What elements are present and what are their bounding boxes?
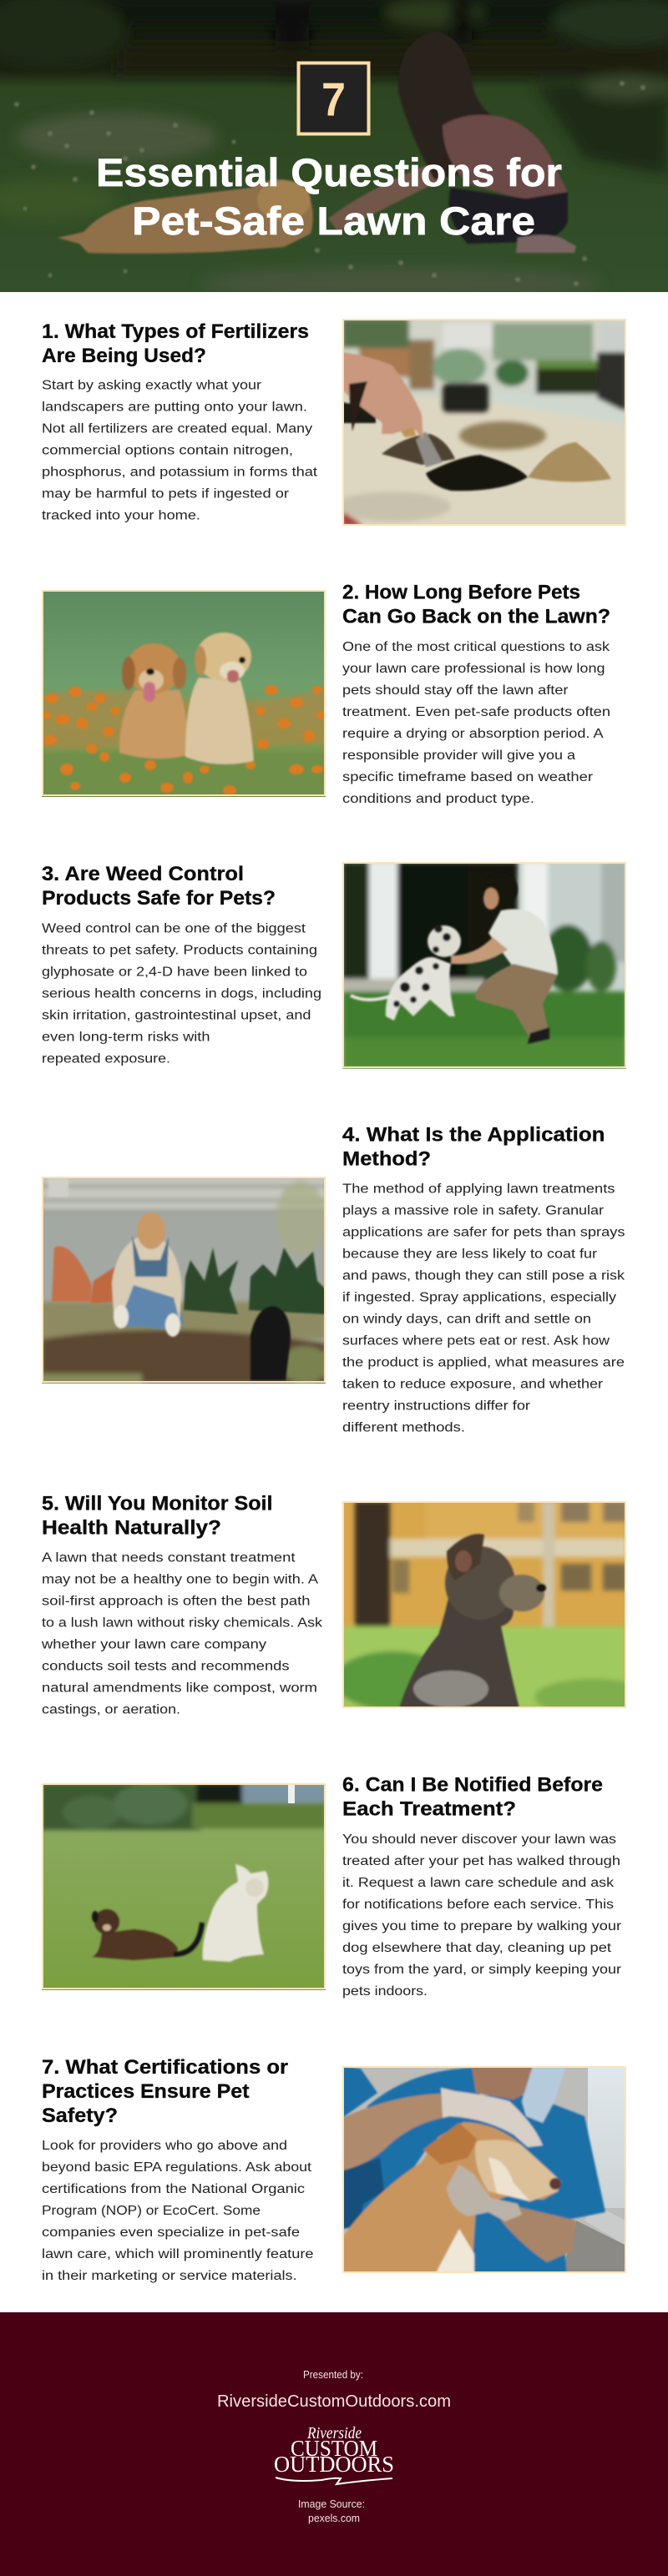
body text 3: serious health concerns in dogs, including [42, 986, 321, 1001]
heading 6: Each Treatment? [342, 1797, 516, 1821]
heading 6: 6. Can I Be Notified Before [342, 1774, 603, 1796]
body text 5: whether your lawn care company [41, 1637, 266, 1652]
body text 1: Not all fertilizers are created equal. Many [42, 422, 312, 436]
body text 1: landscapers are putting onto your lawn. [42, 401, 307, 414]
body text 2: One of the most critical questions to ask [342, 640, 610, 654]
body text 4: applications are safer for pets than sprays [342, 1225, 625, 1240]
heading 7 [42, 2056, 288, 2127]
body text 2: conditions and product type. [342, 792, 534, 806]
body text 3: glyphosate or 2,4-D have been linked to [42, 965, 307, 980]
body text 5: soil-first approach is often the best path [42, 1594, 311, 1609]
body text 2: specific timeframe based on weather [342, 770, 593, 784]
heading 7: 7. What Certifications or [42, 2056, 288, 2079]
heading 4 [342, 1123, 605, 1170]
body text 7: lawn care, which will prominently feature [42, 2247, 314, 2261]
heading 1: Are Being Used? [42, 345, 206, 367]
body text 6: for notifications before each service. This [342, 1898, 614, 1912]
body text 4: if ingested. Spray applications, especially [342, 1290, 616, 1305]
body text 5 [41, 1550, 322, 1717]
panel: question 7 [42, 2056, 626, 2283]
body text 1: commercial options contain nitrogen, [42, 444, 293, 457]
body text 3 [42, 921, 321, 1066]
logo: Riverside [306, 2424, 362, 2442]
title: Pet-Safe Lawn Care [132, 199, 535, 243]
heading 4: Method? [342, 1148, 431, 1170]
body text 1: Start by asking exactly what your [42, 379, 261, 392]
panel: question 1 [42, 319, 626, 526]
heading 1: 1. What Types of Fertilizers [42, 320, 309, 343]
logo [274, 2424, 394, 2484]
body text 6: gives you time to prepare by walking your [342, 1919, 621, 1933]
body text 7: beyond basic EPA regulations. Ask about [42, 2160, 312, 2175]
body text 3: repeated exposure. [42, 1051, 170, 1066]
body text 3: threats to pet safety. Products containing [42, 943, 317, 958]
heading 7: Safety? [42, 2105, 118, 2127]
image source: pexels.com [308, 2512, 360, 2524]
number badge [299, 63, 369, 134]
body text 1: tracked into your home. [42, 509, 200, 522]
body text 4: because they are less likely to coat fur [342, 1247, 597, 1262]
body text 2 [342, 640, 610, 806]
website url: RiversideCustomOutdoors.com [217, 2392, 451, 2411]
panel: question 6 [42, 1774, 621, 1999]
body text 7: Program (NOP) or EcoCert. Some [42, 2204, 261, 2218]
heading 3: 3. Are Weed Control [42, 863, 244, 885]
body text 4 [342, 1182, 625, 1435]
body text 7 [42, 2139, 314, 2283]
heading 7: Practices Ensure Pet [42, 2080, 250, 2103]
heading 6 [342, 1774, 603, 1821]
photo: vet holding a golden dog [342, 2066, 626, 2273]
panel: question 4 [42, 1123, 625, 1435]
image source [298, 2498, 365, 2524]
photo: scruffy dog in grass [342, 1501, 626, 1708]
body text 6 [342, 1832, 621, 1999]
heading 1 [42, 320, 309, 367]
number badge: 7 [321, 73, 346, 127]
body text 3: even long-term risks with [42, 1030, 210, 1045]
logo: CUSTOM [291, 2436, 377, 2461]
heading 3 [42, 863, 276, 910]
heading 2 [342, 581, 610, 628]
body text 3: skin irritation, gastrointestinal upset, and [42, 1008, 311, 1023]
body text 6: You should never discover your lawn was [342, 1832, 616, 1847]
heading 5: Health Naturally? [42, 1517, 221, 1539]
body text 7: companies even specialize in pet-safe [42, 2226, 300, 2240]
body text 6: it. Request a lawn care schedule and ask [342, 1876, 614, 1890]
photo: two dogs sitting on a lawn [42, 1783, 326, 1990]
body text 2: your lawn care professional is how long [342, 662, 605, 676]
panel: question 3 [42, 862, 626, 1069]
heading 3: Products Safe for Pets? [42, 887, 276, 910]
presented by: Presented by: [303, 2368, 363, 2381]
photo: gardener digging soil with black dog [42, 1177, 330, 1384]
body text 2: require a drying or absorption period. A [342, 727, 604, 741]
body text 4: and paws, though they can still pose a risk [342, 1268, 625, 1283]
body text 6: pets indoors. [342, 1984, 428, 1999]
body text 3: Weed control can be one of the biggest [42, 921, 306, 936]
body text 6: toys from the yard, or simply keeping your [342, 1963, 621, 1977]
body text 4: the product is applied, what measures are [342, 1355, 625, 1370]
footer [0, 2312, 668, 2576]
body text 1: phosphorus, and potassium in forms that [42, 466, 318, 479]
title [96, 150, 562, 243]
body text 5: to a lush lawn without risky chemicals. Ask [42, 1616, 322, 1631]
body text 6: treated after your pet has walked through [342, 1854, 620, 1868]
body text 4: on windy days, can drift and settle on [342, 1312, 591, 1327]
body text 4: The method of applying lawn treatments [342, 1182, 615, 1197]
body text 5: castings, or aeration. [42, 1702, 180, 1717]
hero photo: girl and dog on lawn [0, 0, 668, 300]
body text 5: may not be a healthy one to begin with. A [42, 1572, 319, 1587]
photo: man with dalmatian on lawn [342, 862, 626, 1069]
heading 2: Can Go Back on the Lawn? [342, 606, 610, 628]
body text 5: conducts soil tests and recommends [42, 1659, 290, 1674]
logo: OUTDOORS [274, 2452, 394, 2477]
hero banner [0, 0, 668, 300]
heading 4: 4. What Is the Application [342, 1123, 605, 1147]
photo: two golden retriever puppies [41, 590, 326, 797]
photo: hand scooping soil [334, 319, 626, 526]
body text 6: dog elsewhere that day, cleaning up pet [342, 1941, 612, 1955]
body text 4: taken to reduce exposure, and whether [342, 1377, 603, 1392]
title: Essential Questions for [96, 150, 562, 194]
body text 1: may be harmful to pets if ingested or [42, 487, 289, 501]
heading 2: 2. How Long Before Pets [342, 581, 580, 604]
body text 1 [42, 379, 318, 522]
body text 4: surfaces where pets eat or rest. Ask how [342, 1333, 610, 1348]
heading 5 [42, 1492, 272, 1539]
panel: question 5 [41, 1492, 651, 1717]
body text 5: natural amendments like compost, worm [42, 1681, 317, 1696]
body text 4: reentry instructions differ for [342, 1399, 530, 1414]
body text 5: A lawn that needs constant treatment [42, 1550, 296, 1565]
body text 7: certifications from the National Organic [42, 2182, 305, 2196]
image source: Image Source: [298, 2498, 365, 2510]
heading 5: 5. Will You Monitor Soil [42, 1492, 272, 1515]
body text 4: different methods. [342, 1420, 465, 1435]
body text 7: in their marketing or service materials. [42, 2269, 297, 2283]
body text 4: plays a massive role in safety. Granular [342, 1203, 604, 1218]
body text 2: treatment. Even pet-safe products often [342, 705, 610, 719]
body text 2: responsible provider will give you a [342, 749, 575, 763]
body text 7: Look for providers who go above and [42, 2139, 287, 2153]
body text 2: pets should stay off the lawn after [342, 683, 568, 698]
panel: question 2 [41, 581, 610, 806]
